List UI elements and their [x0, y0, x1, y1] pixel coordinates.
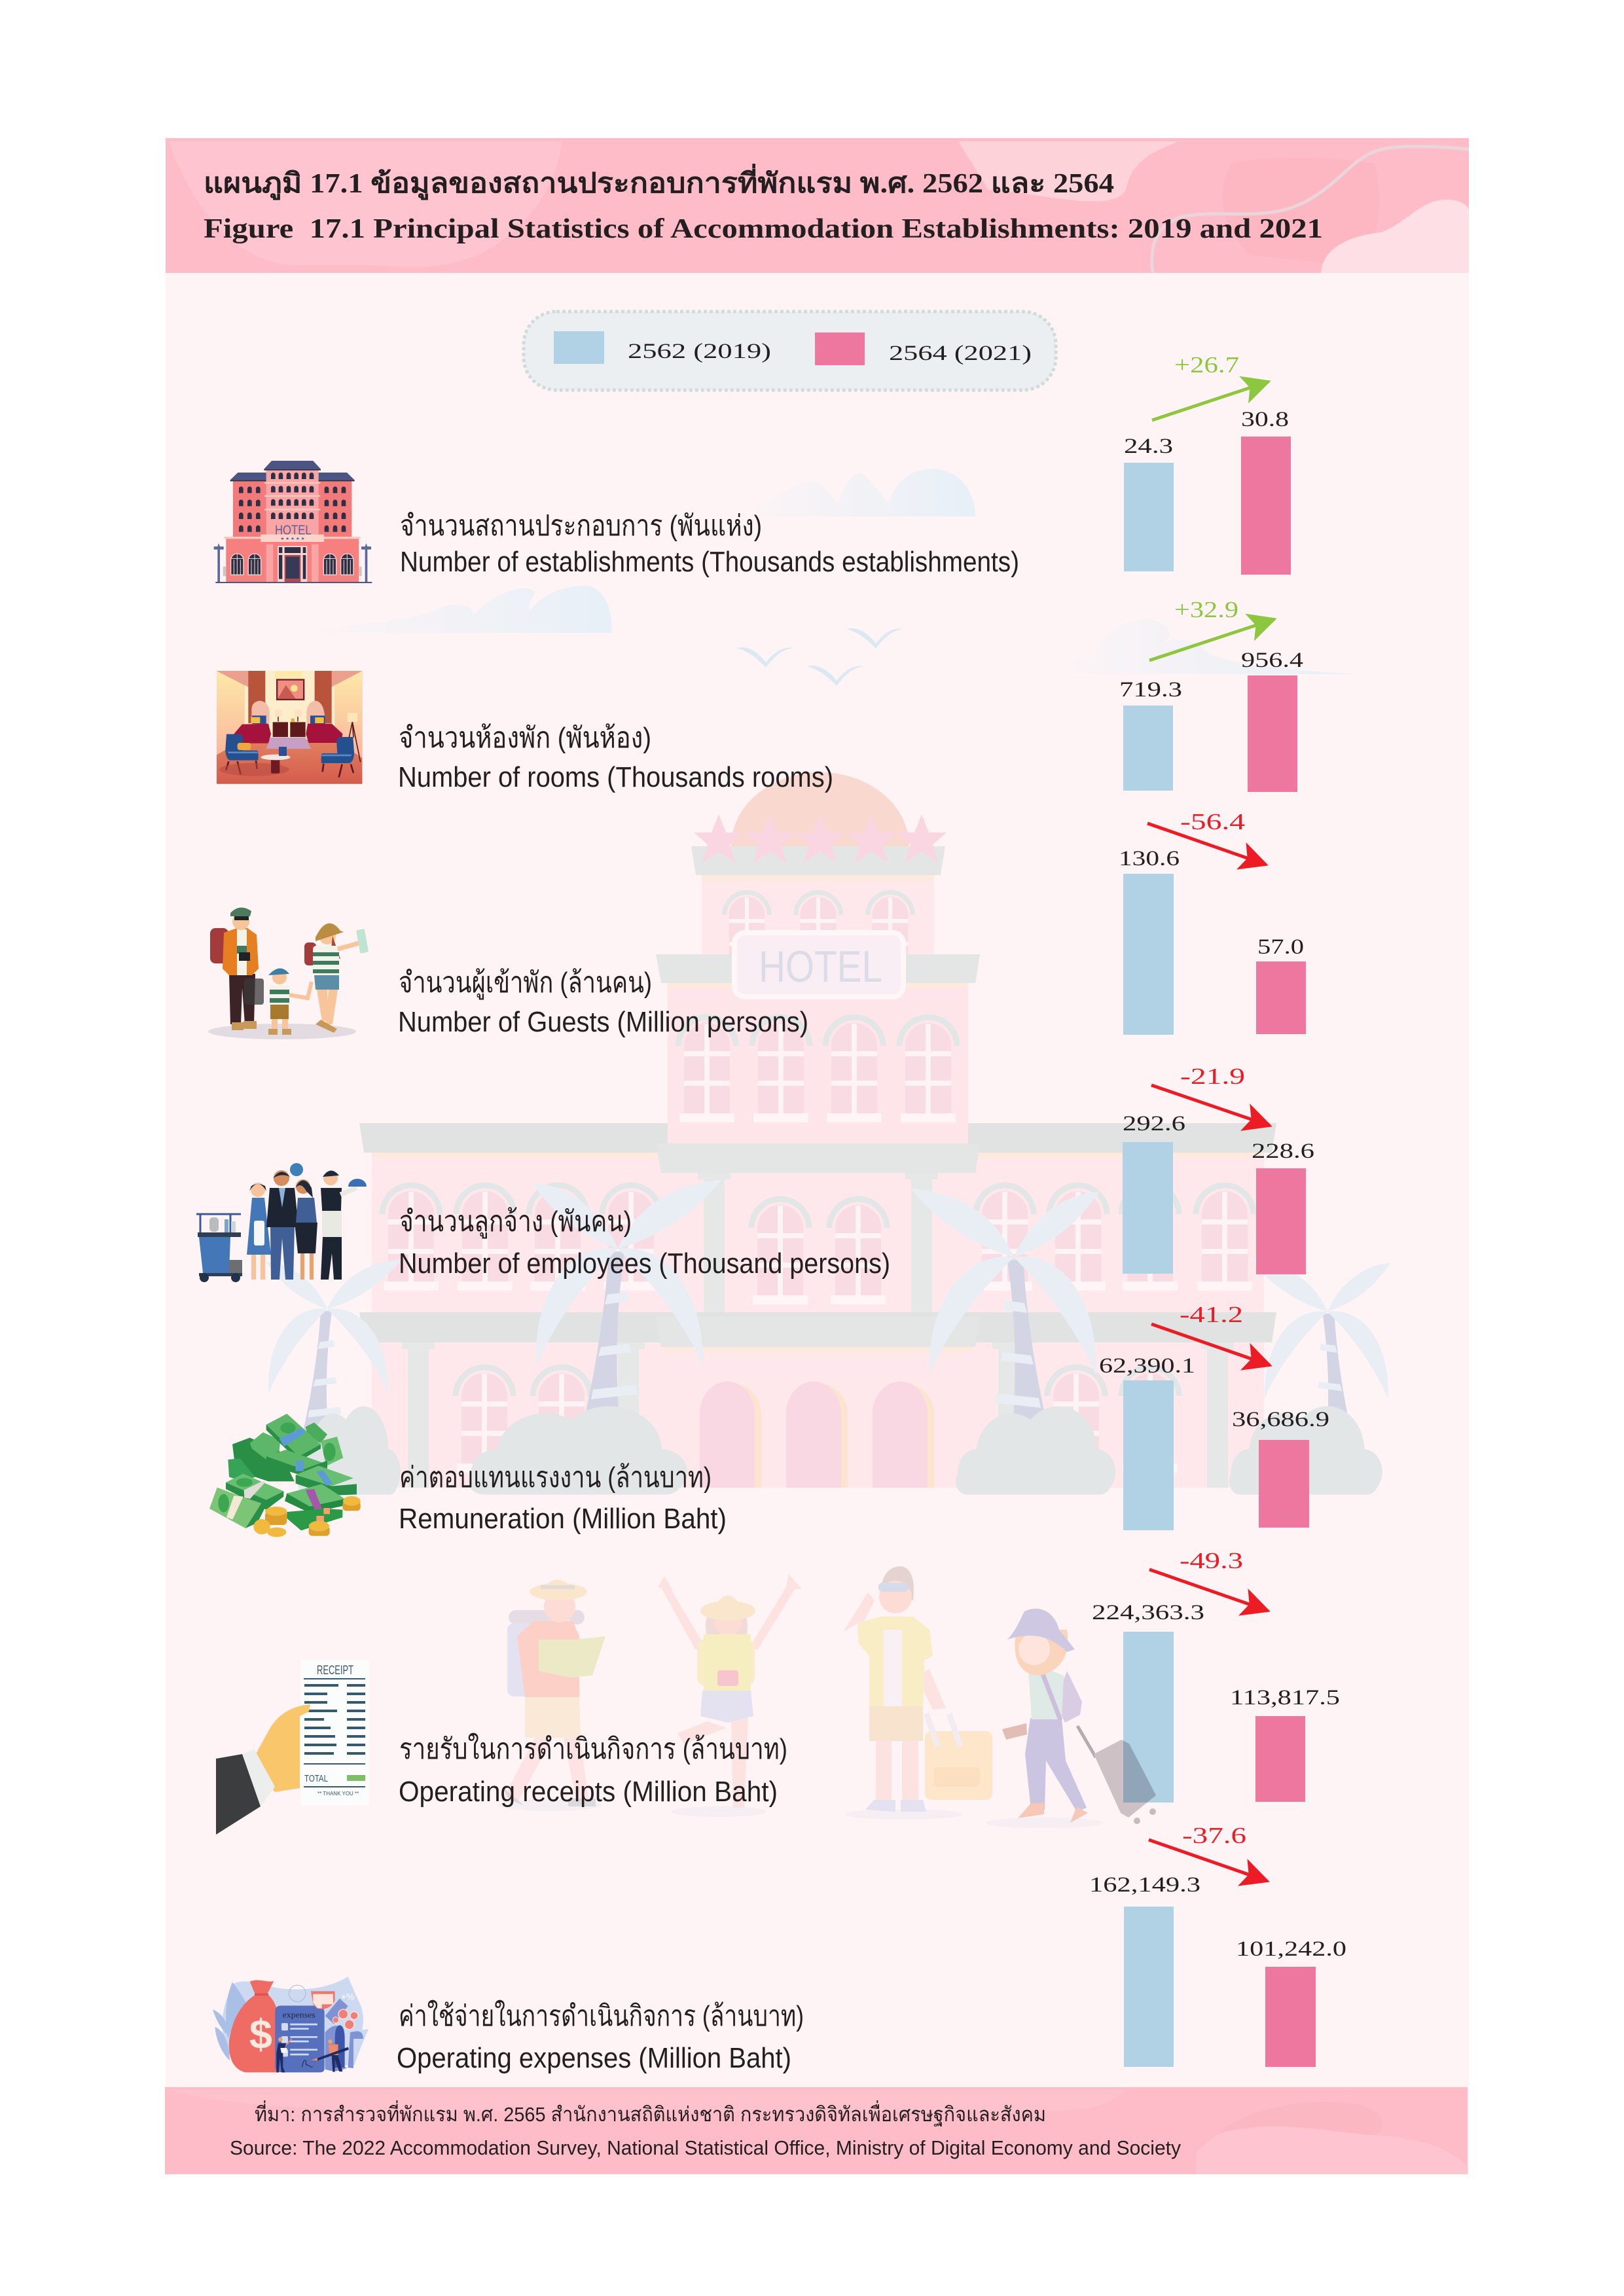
footer source text [230, 2100, 1181, 2159]
icon: hand holding receipt: TOTAL [304, 1773, 328, 1784]
background tourist: woman with raised arms [658, 1574, 802, 1817]
background hotel sign [734, 933, 903, 997]
value 2564: 36,686.9 [1232, 1408, 1329, 1431]
bars: operating expenses [1089, 1823, 1346, 2067]
arrow down [1149, 1570, 1268, 1611]
label: expenses [397, 2000, 804, 2074]
value 2562: 224,363.3 [1092, 1601, 1204, 1624]
label: expenses: ค่าใช้จ่ายในการดำเนินกิจการ (ล้านบาท) [399, 2000, 804, 2032]
arrow down [1147, 823, 1266, 865]
change value: -21.9 [1180, 1064, 1245, 1089]
label: rooms: Number of rooms (Thousands rooms) [398, 761, 833, 793]
value 2562: 719.3 [1119, 678, 1182, 702]
icon: hotel building: ★★★★★ [280, 536, 305, 541]
icon: hotel building [214, 461, 372, 583]
icon: operating expenses: $ [249, 2012, 272, 2058]
change value: -56.4 [1180, 809, 1245, 834]
background palms and bushes [266, 1180, 1390, 1495]
background stars [694, 814, 947, 863]
arrow up [1149, 619, 1274, 660]
background tourist: man with map [497, 1580, 605, 1811]
value 2564: 30.8 [1241, 408, 1289, 431]
value 2562: 24.3 [1124, 435, 1173, 458]
footer band [165, 2087, 1468, 2174]
arrow down [1151, 1324, 1270, 1365]
change value: -41.2 [1180, 1302, 1243, 1327]
label: remuneration: ค่าตอบแทนแรงงาน (ล้านบาท) [399, 1462, 712, 1494]
header title [204, 164, 1323, 244]
label: rooms [398, 722, 833, 793]
bars: number of establishments [1124, 352, 1291, 575]
change value: +32.9 [1174, 597, 1238, 622]
change value: +26.7 [1174, 352, 1239, 378]
label: guests: Number of Guests (Million persons) [398, 1006, 808, 1038]
label: rooms: จำนวนห้องพัก (พันห้อง) [399, 722, 651, 754]
header title: แผนภูมิ 17.1 ข้อมูลของสถานประกอบการที่พักแรม พ.ศ. 2562 และ 2564 [204, 164, 1114, 200]
change value: -49.3 [1180, 1548, 1243, 1573]
icon: operating expenses: +% [341, 1992, 355, 2002]
bars: number of employees [1123, 1064, 1314, 1274]
value 2564: 228.6 [1252, 1139, 1314, 1163]
icon: stack of money [209, 1414, 361, 1537]
legend label 2564: 2564 (2021) [889, 342, 1032, 365]
background tourist suitcase overlapping bar [1077, 1726, 1156, 1824]
page background panel [166, 138, 1469, 2174]
label: establishments: Number of establishments (Thousands establishments) [400, 546, 1019, 578]
label: establishments [400, 510, 1019, 578]
background hotel illustration [359, 772, 1276, 1488]
value 2562: 162,149.3 [1089, 1873, 1200, 1897]
label: guests: จำนวนผู้เข้าพัก (ล้านคน) [399, 967, 652, 1000]
header band [166, 138, 1469, 273]
label: expenses: Operating expenses (Million Baht) [397, 2042, 791, 2074]
bars: operating receipts [1092, 1548, 1340, 1803]
bars: number of guests [1119, 809, 1306, 1035]
value 2562: 130.6 [1119, 847, 1180, 870]
value 2564: 113,817.5 [1230, 1686, 1340, 1710]
icon: operating expenses: expenses [283, 2010, 316, 2019]
label: remuneration [399, 1462, 727, 1535]
label: establishments: จำนวนสถานประกอบการ (พันแห่ง) [400, 510, 762, 542]
value 2562: 292.6 [1123, 1112, 1185, 1136]
footer source text: ที่มา: การสำรวจที่พักแรม พ.ศ. 2565 สำนักงานสถิติแห่งชาติ กระทรวงดิจิทัลเพื่อเศรษฐกิจและสังคม [255, 2100, 1046, 2126]
arrow up [1152, 382, 1269, 420]
footer source text: Source: The 2022 Accommodation Survey, National Statistical Office, Ministry of Digital Economy and Society [230, 2136, 1181, 2159]
label: receipts: รายรับในการดำเนินกิจการ (ล้านบาท) [399, 1732, 787, 1765]
icon: hand holding receipt: RECEIPT [317, 1664, 353, 1677]
background tourist: woman with backpack [986, 1609, 1104, 1828]
background hotel sign: HOTEL [759, 942, 882, 992]
legend swatch 2562 [554, 331, 604, 364]
change value: -37.6 [1182, 1823, 1246, 1848]
icon: operating expenses [213, 1977, 369, 2072]
icon: hotel building: HOTEL [275, 523, 312, 538]
bars: remuneration [1099, 1302, 1329, 1530]
icon: hand holding receipt [216, 1660, 369, 1835]
background tourist: man with yellow suitcase [843, 1566, 992, 1820]
bars: number of rooms [1119, 597, 1303, 792]
icon: family of travellers [208, 908, 369, 1039]
label: receipts: Operating receipts (Million Baht) [399, 1776, 778, 1808]
value 2562: 62,390.1 [1099, 1354, 1195, 1378]
label: employees: จำนวนลูกจ้าง (พันคน) [399, 1206, 632, 1239]
label: employees: Number of employees (Thousand persons) [399, 1247, 890, 1280]
legend [524, 312, 1056, 390]
background clouds and birds [295, 469, 1355, 686]
arrow down [1149, 1840, 1267, 1881]
legend swatch 2564 [815, 332, 865, 365]
value 2564: 956.4 [1241, 649, 1303, 672]
icon: hand holding receipt: ** THANK YOU ** [317, 1791, 359, 1797]
label: employees [399, 1206, 890, 1280]
icon: hotel room [217, 671, 362, 784]
value 2564: 101,242.0 [1236, 1937, 1346, 1961]
value 2564: 57.0 [1257, 935, 1304, 959]
arrow down [1151, 1085, 1270, 1126]
legend label 2562: 2562 (2019) [628, 340, 771, 363]
header title: Figure 17.1 Principal Statistics of Accommodation Establishments: 2019 and 2021 [204, 214, 1323, 244]
label: remuneration: Remuneration (Million Baht) [399, 1503, 727, 1535]
label: receipts [399, 1732, 787, 1808]
label: guests [398, 967, 808, 1038]
icon: hotel staff [196, 1163, 367, 1282]
